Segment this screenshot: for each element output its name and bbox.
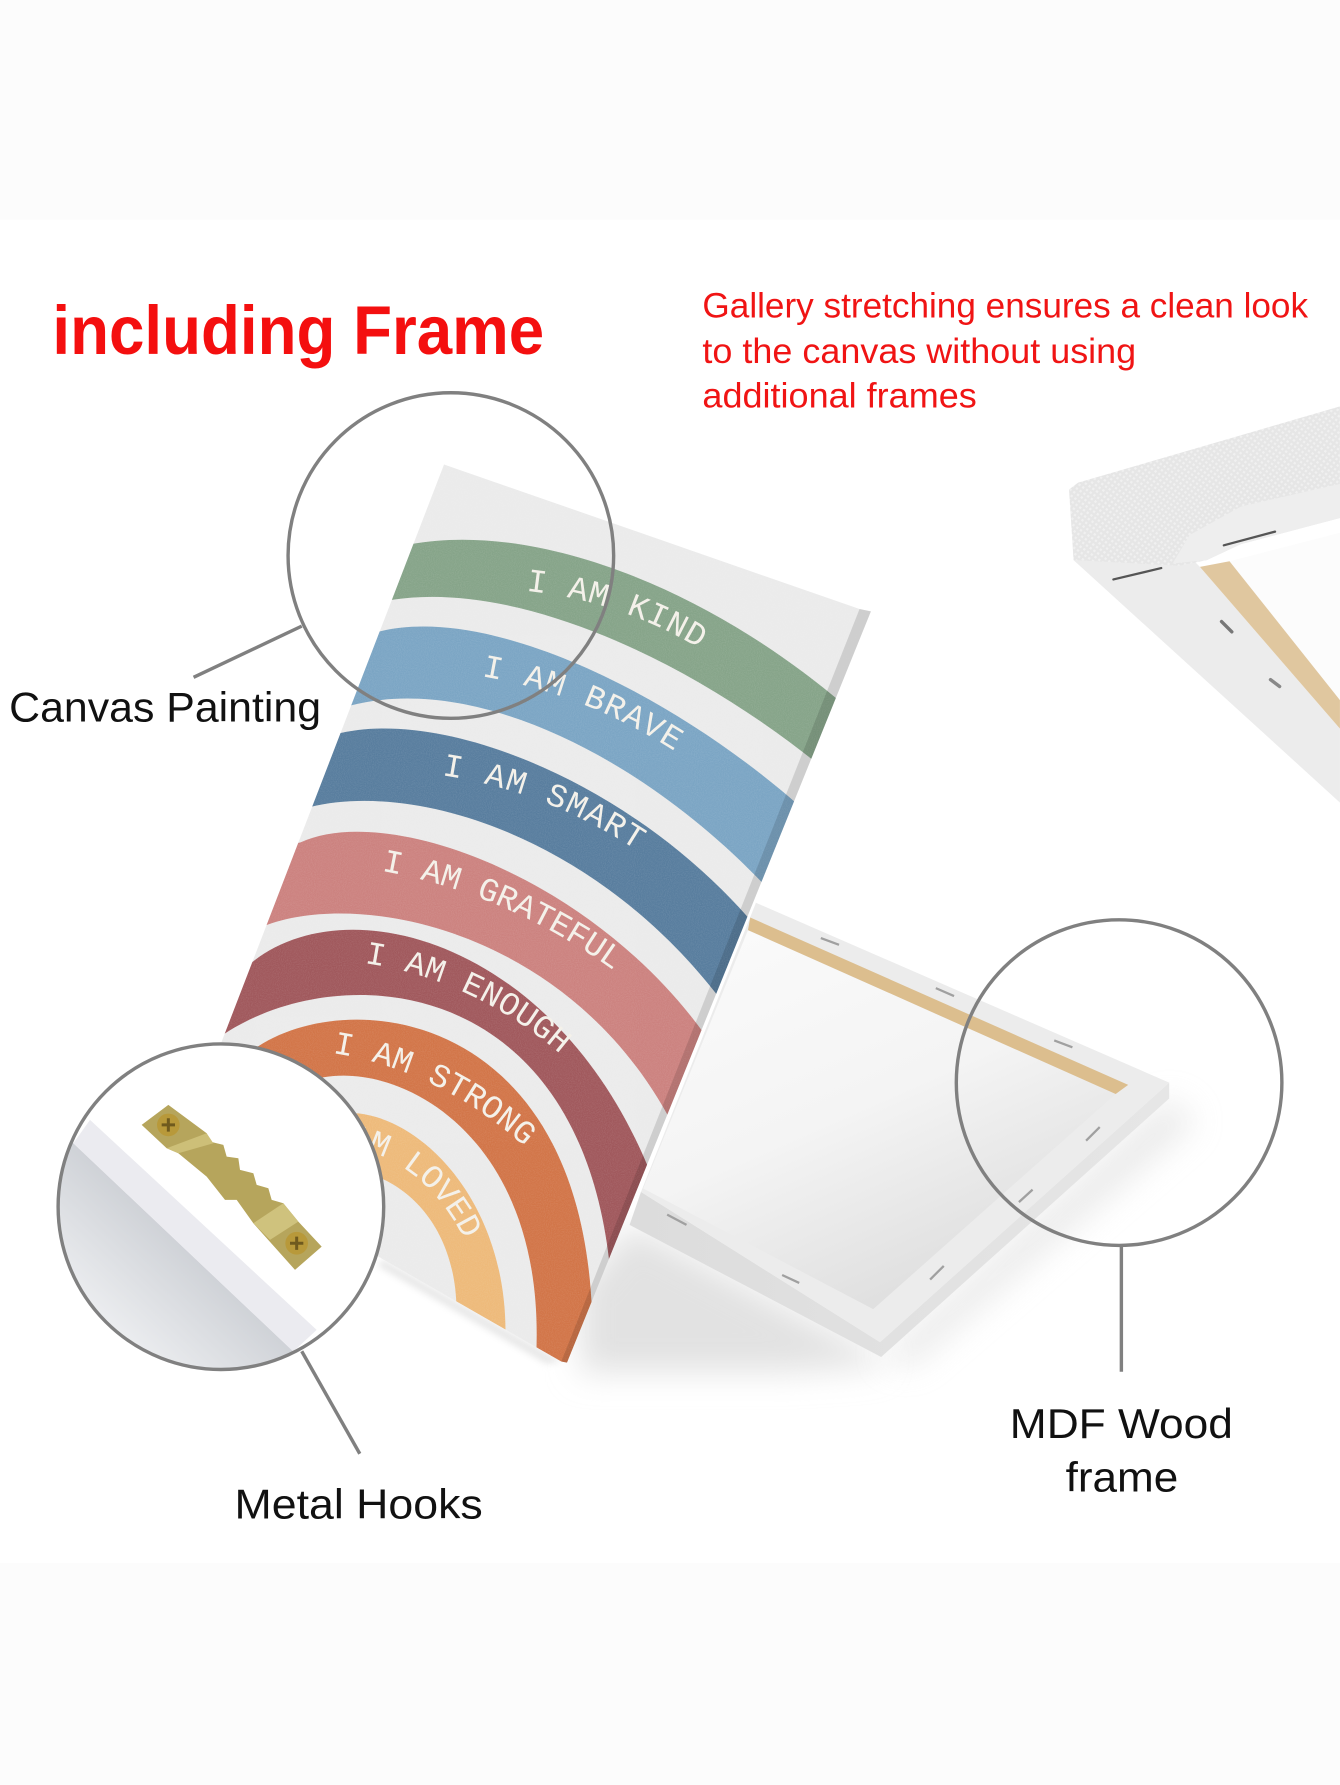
front canvas with rainbow	[222, 464, 871, 1363]
frame underside	[60, 1143, 292, 1368]
corner wood strip	[1200, 561, 1340, 729]
red description text: additional frames	[702, 377, 977, 416]
arc label: I AM BRAVE: I AM BRAVE	[484, 655, 684, 750]
dark blue arc	[296, 729, 756, 1004]
corner back frame	[1074, 546, 1340, 803]
back inner canvas	[643, 930, 1116, 1309]
corner staples	[1113, 532, 1280, 686]
frame edge	[73, 1120, 317, 1352]
label: MDF wood frame: MDF Wood	[1010, 1400, 1233, 1447]
callout circle: canvas painting	[288, 393, 614, 718]
corner side face	[1069, 406, 1340, 566]
rainbow arcs	[199, 540, 842, 1366]
top band	[0, 0, 1340, 220]
label: MDF wood frame	[1010, 1400, 1233, 1500]
arc label: I AM LOVED: I AM LOVED	[364, 1126, 480, 1235]
arc label: I AM SMART: I AM SMART	[445, 754, 648, 846]
canvas weave noise	[226, 540, 832, 1362]
arc label: I AM ENOUGH: I AM ENOUGH	[368, 942, 571, 1052]
label: MDF wood frame: frame	[1066, 1453, 1178, 1500]
canvas spine shading	[561, 609, 871, 1363]
canvas face	[182, 464, 871, 1363]
label: canvas painting: Canvas Painting	[9, 684, 321, 731]
callout line: MDF wood frame	[1120, 1247, 1123, 1372]
arc label: I AM STRONG: I AM STRONG	[336, 1032, 535, 1144]
pink arc	[266, 832, 702, 1115]
red description text	[702, 287, 1308, 416]
callout circle: MDF wood frame	[956, 920, 1282, 1245]
yellow arc	[356, 1113, 506, 1330]
corner inner canvas	[1230, 533, 1340, 700]
back frame top	[641, 903, 1169, 1342]
sawtooth hook	[142, 1105, 322, 1270]
back staples	[667, 938, 1100, 1283]
title: including Frame	[52, 293, 544, 369]
floor shadow	[378, 1099, 1195, 1372]
arc label: I AM GRATEFUL: I AM GRATEFUL	[384, 850, 616, 970]
arc label: I AM KIND: I AM KIND	[529, 570, 706, 644]
callout line: metal hooks	[302, 1351, 360, 1454]
back frame side	[630, 1083, 1169, 1357]
callout circle: metal hooks detail	[56, 1042, 386, 1372]
bottom band	[0, 1563, 1340, 1785]
corner lighter fold	[1173, 484, 1340, 564]
maroon arc	[199, 930, 651, 1270]
red description text: Gallery stretching ensures a clean look	[702, 287, 1308, 326]
red description text: to the canvas without using	[702, 332, 1136, 371]
wood strip	[748, 918, 1128, 1094]
corner detail of stretched canvas	[1069, 406, 1340, 803]
back of canvas lying down	[630, 903, 1169, 1357]
infographic	[11, 292, 1340, 1519]
label: metal hooks: Metal Hooks	[235, 1481, 483, 1528]
callout line: canvas painting	[194, 626, 302, 677]
green arc	[381, 540, 842, 767]
light blue arc	[342, 627, 797, 886]
orange arc	[228, 1020, 592, 1366]
